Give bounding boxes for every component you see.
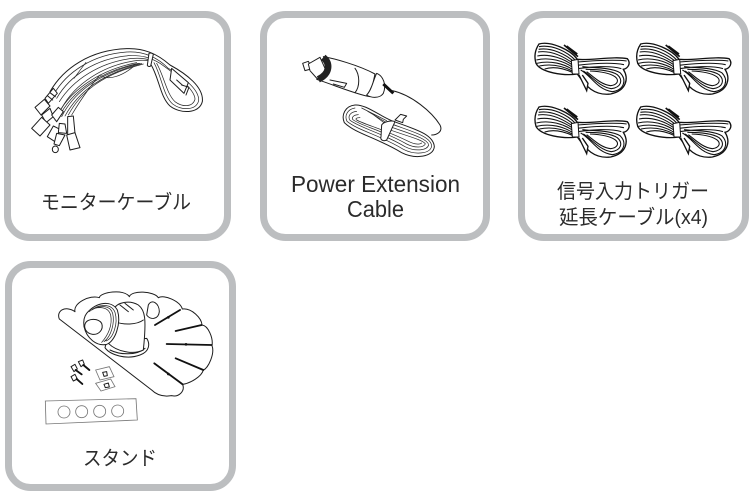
icon: monitor cable bundle — [32, 49, 202, 153]
panel: power extension cable — [264, 14, 486, 238]
adhesive base — [59, 292, 213, 396]
label: monitor cable: モニターケーブル — [41, 190, 191, 214]
adhesive pads — [96, 367, 114, 380]
icon: coiled trigger cable, top left — [535, 43, 629, 94]
icon: coiled trigger cable, top right — [637, 43, 731, 94]
drill template plate — [45, 399, 137, 424]
panel: signal trigger extension cables — [522, 14, 746, 238]
label: signal trigger extension cables: 信号入力トリガー — [557, 180, 709, 203]
mount head — [105, 338, 149, 357]
panel frame — [264, 14, 486, 238]
icon: car power plug and coiled cord — [303, 57, 441, 157]
icon: stand with adhesive base, screws and plate — [45, 292, 213, 424]
icon: coiled trigger cable, bottom left — [535, 106, 629, 157]
cable tie — [147, 53, 153, 66]
label: signal trigger extension cables: 延長ケーブル(x4) — [559, 205, 708, 229]
screws — [71, 360, 84, 381]
connectors — [45, 88, 57, 103]
panel: stand — [8, 264, 232, 488]
label: stand: スタンド — [83, 447, 157, 470]
label: power extension cable: Cable — [347, 196, 404, 222]
label: power extension cable: Power Extension — [291, 171, 460, 197]
panel frame — [8, 264, 232, 488]
icon: coiled trigger cable, bottom right — [637, 106, 731, 157]
label: power extension cable — [291, 171, 460, 222]
panel: monitor cable — [8, 14, 228, 238]
panel frame — [8, 14, 228, 238]
label: signal trigger extension cables — [557, 180, 709, 229]
plug — [170, 68, 188, 93]
panel frame — [522, 14, 746, 238]
